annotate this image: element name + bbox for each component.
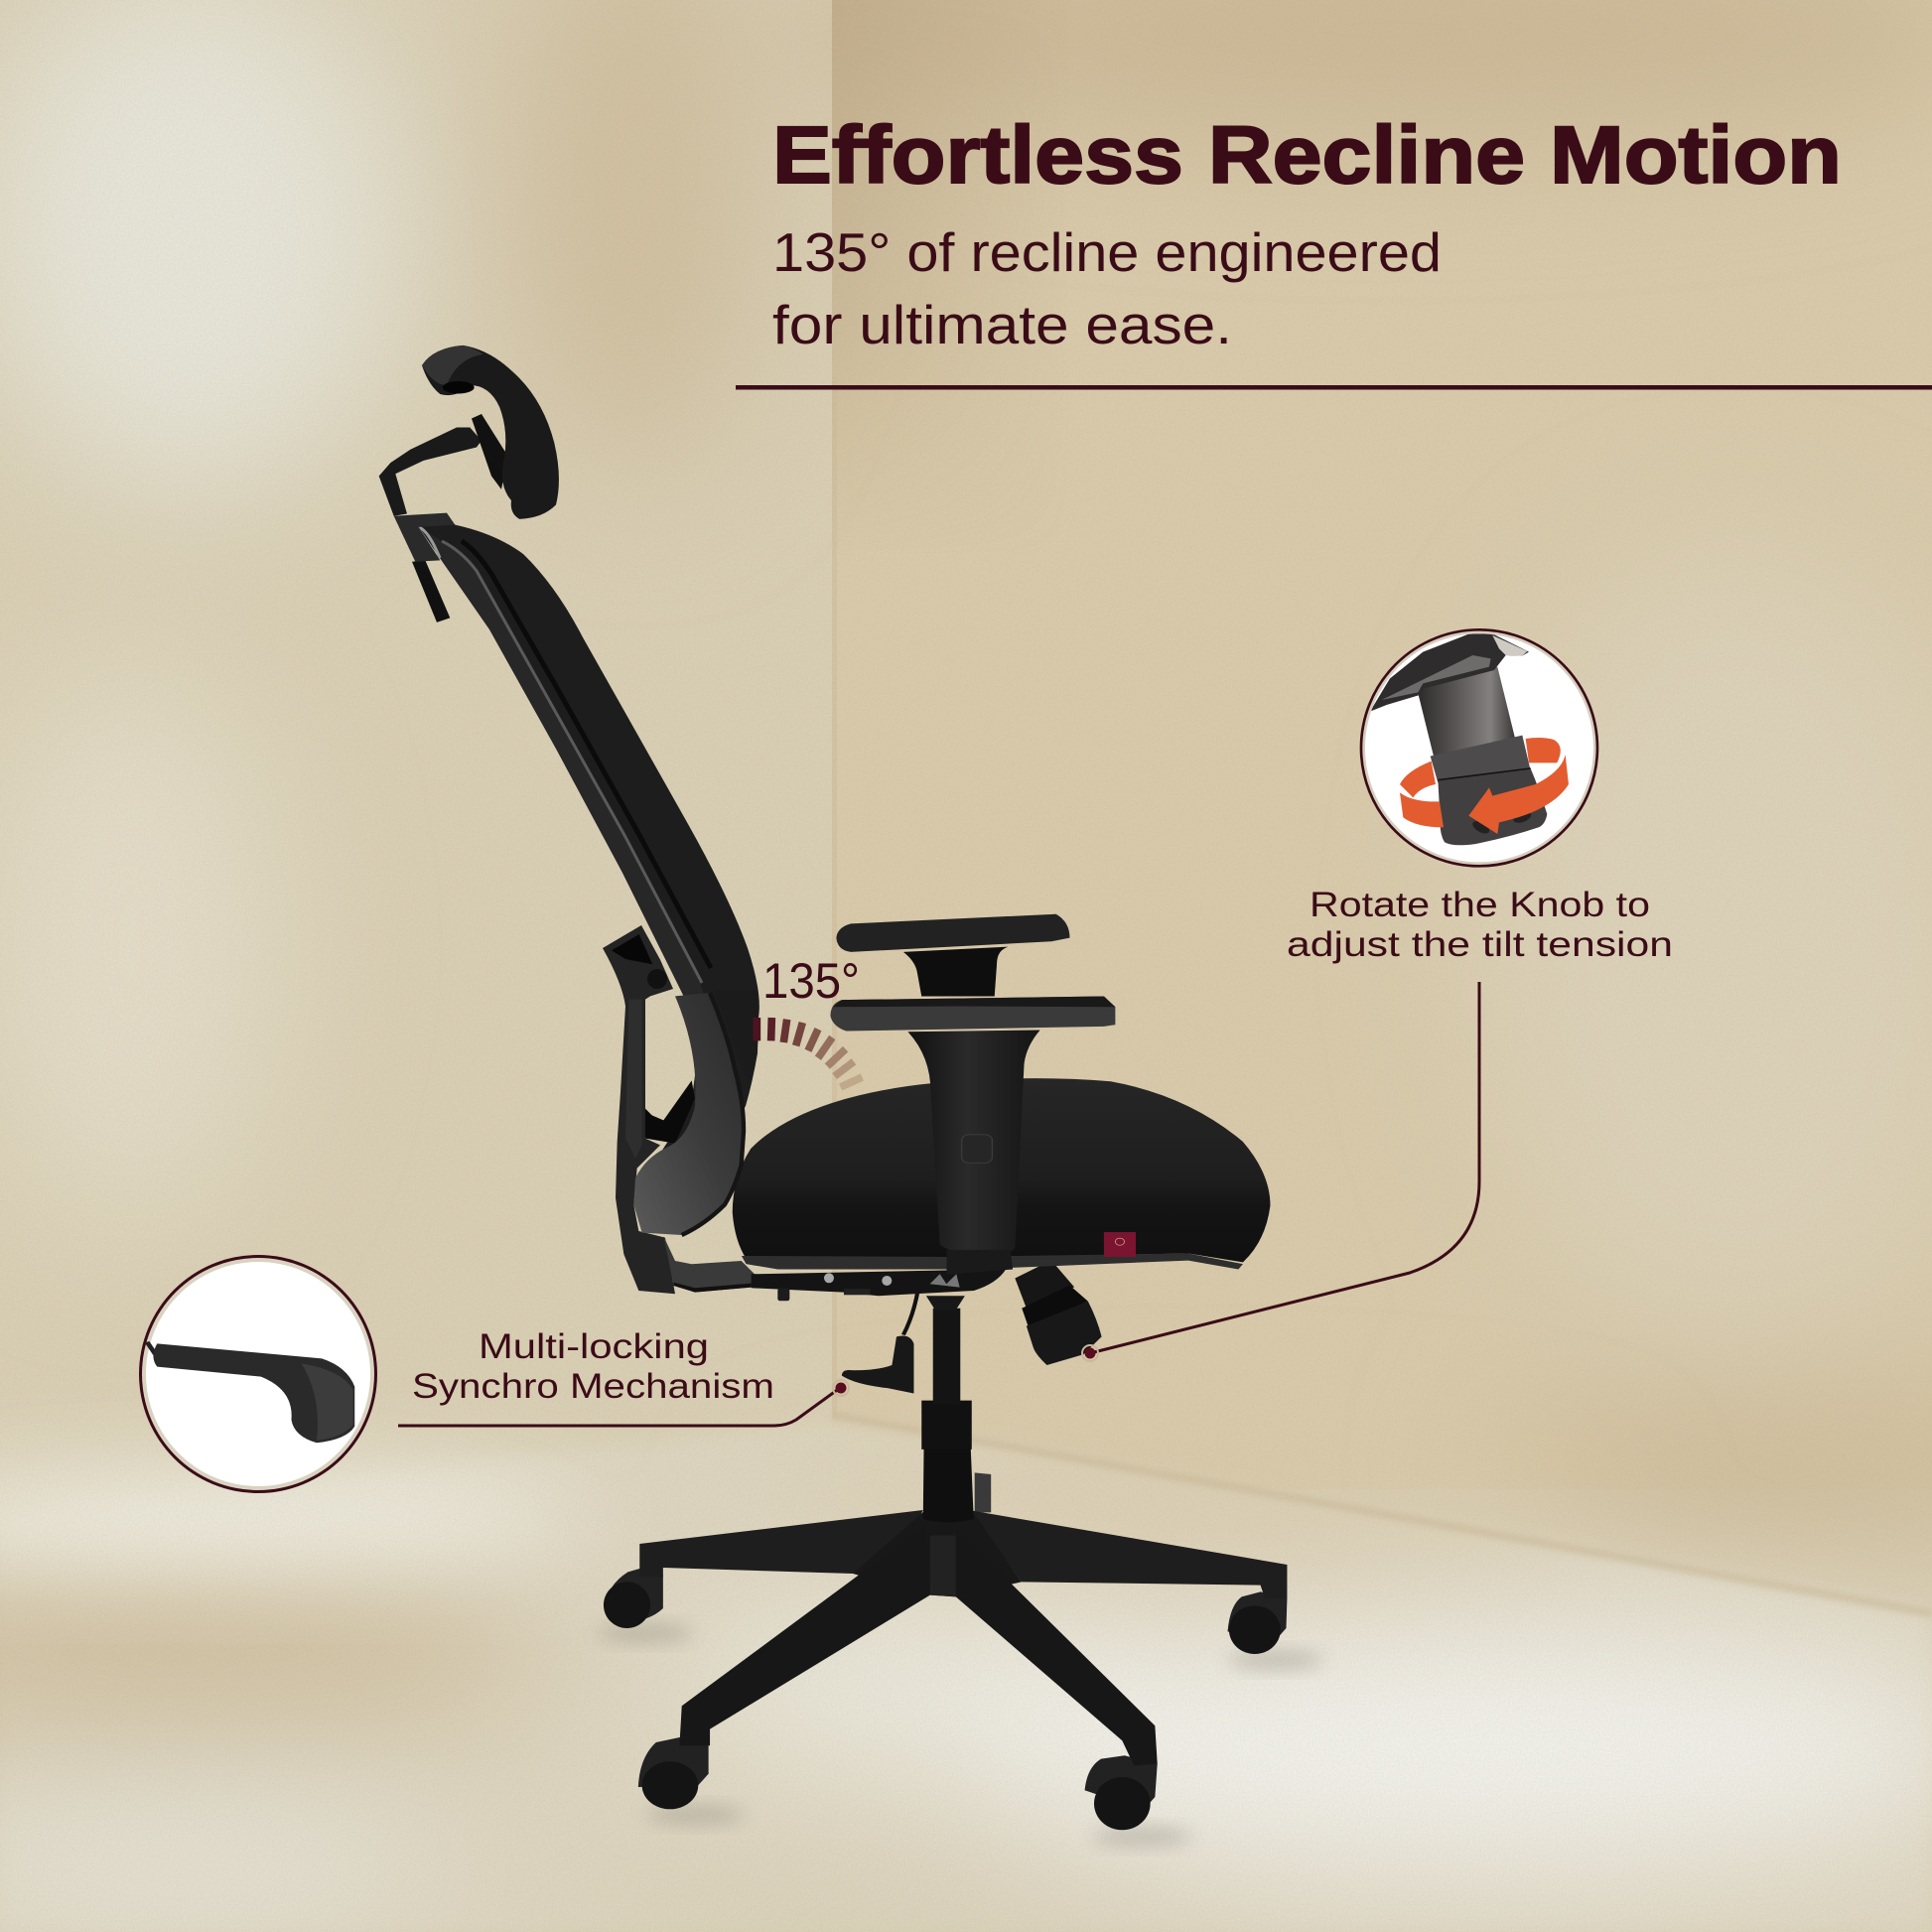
label: Rotate the Knob to <box>1310 886 1650 924</box>
recline angle gauge <box>757 953 862 1087</box>
label: adjust the tilt tension <box>1287 925 1673 964</box>
label: Multi-locking <box>479 1327 709 1366</box>
gas lift <box>921 1401 972 1449</box>
seat cushion <box>733 1078 1270 1262</box>
tilt tension knob <box>1015 1266 1102 1365</box>
inset: lever handle <box>139 1255 377 1493</box>
spine column <box>603 925 675 1294</box>
rear support arm <box>663 1236 755 1293</box>
angle label: 135° <box>762 953 860 1009</box>
leader line <box>1090 982 1479 1353</box>
leader line <box>398 1388 840 1426</box>
anchor dot <box>1082 1345 1098 1361</box>
inset: knob with rotation arrow <box>1361 630 1597 866</box>
label: Synchro Mechanism <box>412 1367 774 1406</box>
backrest <box>419 522 759 1191</box>
subtitle: 135° of recline engineered <box>772 221 1442 283</box>
lower back frame <box>603 925 1006 1301</box>
anchor dot <box>833 1380 849 1396</box>
front armrest <box>830 997 1115 1275</box>
lever <box>842 1273 920 1394</box>
title: Effortless Recline Motion <box>772 110 1842 201</box>
header rule <box>736 385 1932 389</box>
connector <box>645 1080 695 1144</box>
armrests <box>830 914 1115 1275</box>
chair <box>379 345 1287 1830</box>
mechanism plate <box>752 1269 1006 1301</box>
rear armrest <box>836 914 1069 997</box>
lower chair assembly <box>733 1078 1270 1449</box>
back cushion frame <box>633 993 744 1235</box>
base <box>604 1430 1287 1830</box>
subtitle: for ultimate ease. <box>772 294 1232 355</box>
callout: rotate knob <box>1082 630 1673 1361</box>
casters <box>604 1569 1287 1830</box>
brand tag <box>1104 1232 1136 1257</box>
callout: multi-locking synchro mechanism <box>139 1255 849 1493</box>
angle ticks <box>757 1018 862 1087</box>
headrest assembly <box>379 345 559 622</box>
